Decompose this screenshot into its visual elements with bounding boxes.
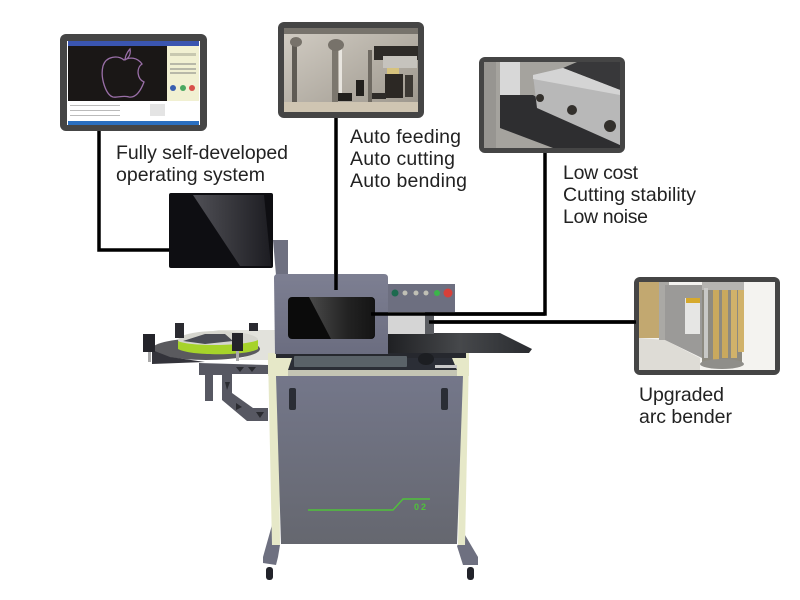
label: operating system: operating system: [116, 164, 265, 186]
model number: 02: [414, 502, 426, 512]
machine head: [274, 274, 388, 354]
side table: [388, 310, 532, 353]
support frame and legs: [263, 353, 478, 580]
connector: operating system to monitor: [99, 131, 170, 250]
panel: cutting block photo: [479, 57, 625, 153]
green accent line: [308, 499, 430, 510]
control panel: [388, 284, 455, 312]
label: arc bender: arc bender: [639, 406, 732, 428]
label: operating system: Fully self-developed: [116, 142, 288, 164]
connector overlay: callout lines over machine: [336, 260, 636, 322]
icon: apple outline: [102, 49, 144, 97]
connector: auto feeding to machine head: [334, 118, 338, 290]
label: cost and stability: Cutting stability: [563, 184, 696, 206]
lower cabinet: [276, 376, 463, 544]
material disc: [143, 323, 275, 421]
connector: cutting to machine: [371, 153, 545, 314]
label: cost and stability: Low noise: [563, 206, 648, 228]
keyboard tray: [276, 353, 466, 376]
panel: arc bender photo: [634, 277, 780, 375]
support arm: [199, 363, 268, 421]
label: auto functions: Auto feeding: [350, 126, 461, 148]
label: arc bender: Upgraded: [639, 384, 724, 406]
connector: arc bender to machine: [429, 320, 636, 324]
machine: [143, 193, 532, 580]
panel: auto feeding photo: [278, 22, 424, 118]
monitor: [169, 193, 288, 275]
label: auto functions: Auto bending: [350, 170, 467, 192]
label: auto functions: Auto cutting: [350, 148, 455, 170]
panel: operating system screenshot: [60, 34, 207, 131]
label: cost and stability: Low cost: [563, 162, 639, 184]
